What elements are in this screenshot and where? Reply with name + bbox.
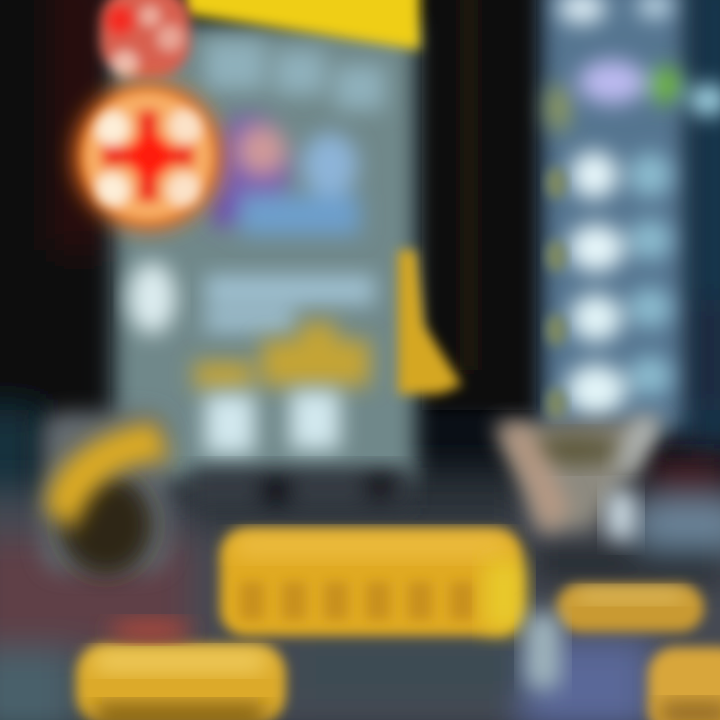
poster: upper bars <box>205 40 385 110</box>
panel: central poster <box>114 0 462 508</box>
poster header: yellow banner <box>185 0 420 50</box>
right cocktail glass <box>495 415 664 540</box>
poster: colorful illustration <box>210 115 360 235</box>
left glass: yellow rim <box>46 422 170 530</box>
pale glass reflection near bottom centre <box>525 612 561 690</box>
icon: large orange casino chip <box>74 82 222 230</box>
right screen: colored top highlights <box>546 0 720 132</box>
panel: right screen <box>542 0 720 430</box>
poster: lower pale blocks <box>205 390 340 454</box>
poster: middle text bars <box>205 275 375 332</box>
background: lower floor <box>0 460 720 720</box>
left glass with yellow drink <box>42 412 170 575</box>
background: dark left wall <box>0 0 110 530</box>
icon: top red and white chip <box>100 0 190 78</box>
large stack: chip edge stripes <box>240 582 474 620</box>
left glass: dark liquid <box>60 475 152 575</box>
poster: circle icon <box>128 262 176 334</box>
right screen: olive side marks <box>546 167 566 420</box>
right screen: list rows with light dots <box>566 151 672 416</box>
poster: yellow chart <box>194 322 370 388</box>
poster: yellow corner mark <box>398 250 462 394</box>
background: central dark column <box>422 0 536 410</box>
yellow stack: right <box>556 584 704 632</box>
large yellow stack of chips <box>220 530 524 636</box>
poster: dark base <box>190 468 410 508</box>
background: far right dark blue <box>680 0 720 450</box>
yellow stack: bottom right <box>648 647 720 720</box>
yellow stack: bottom left <box>76 620 286 720</box>
